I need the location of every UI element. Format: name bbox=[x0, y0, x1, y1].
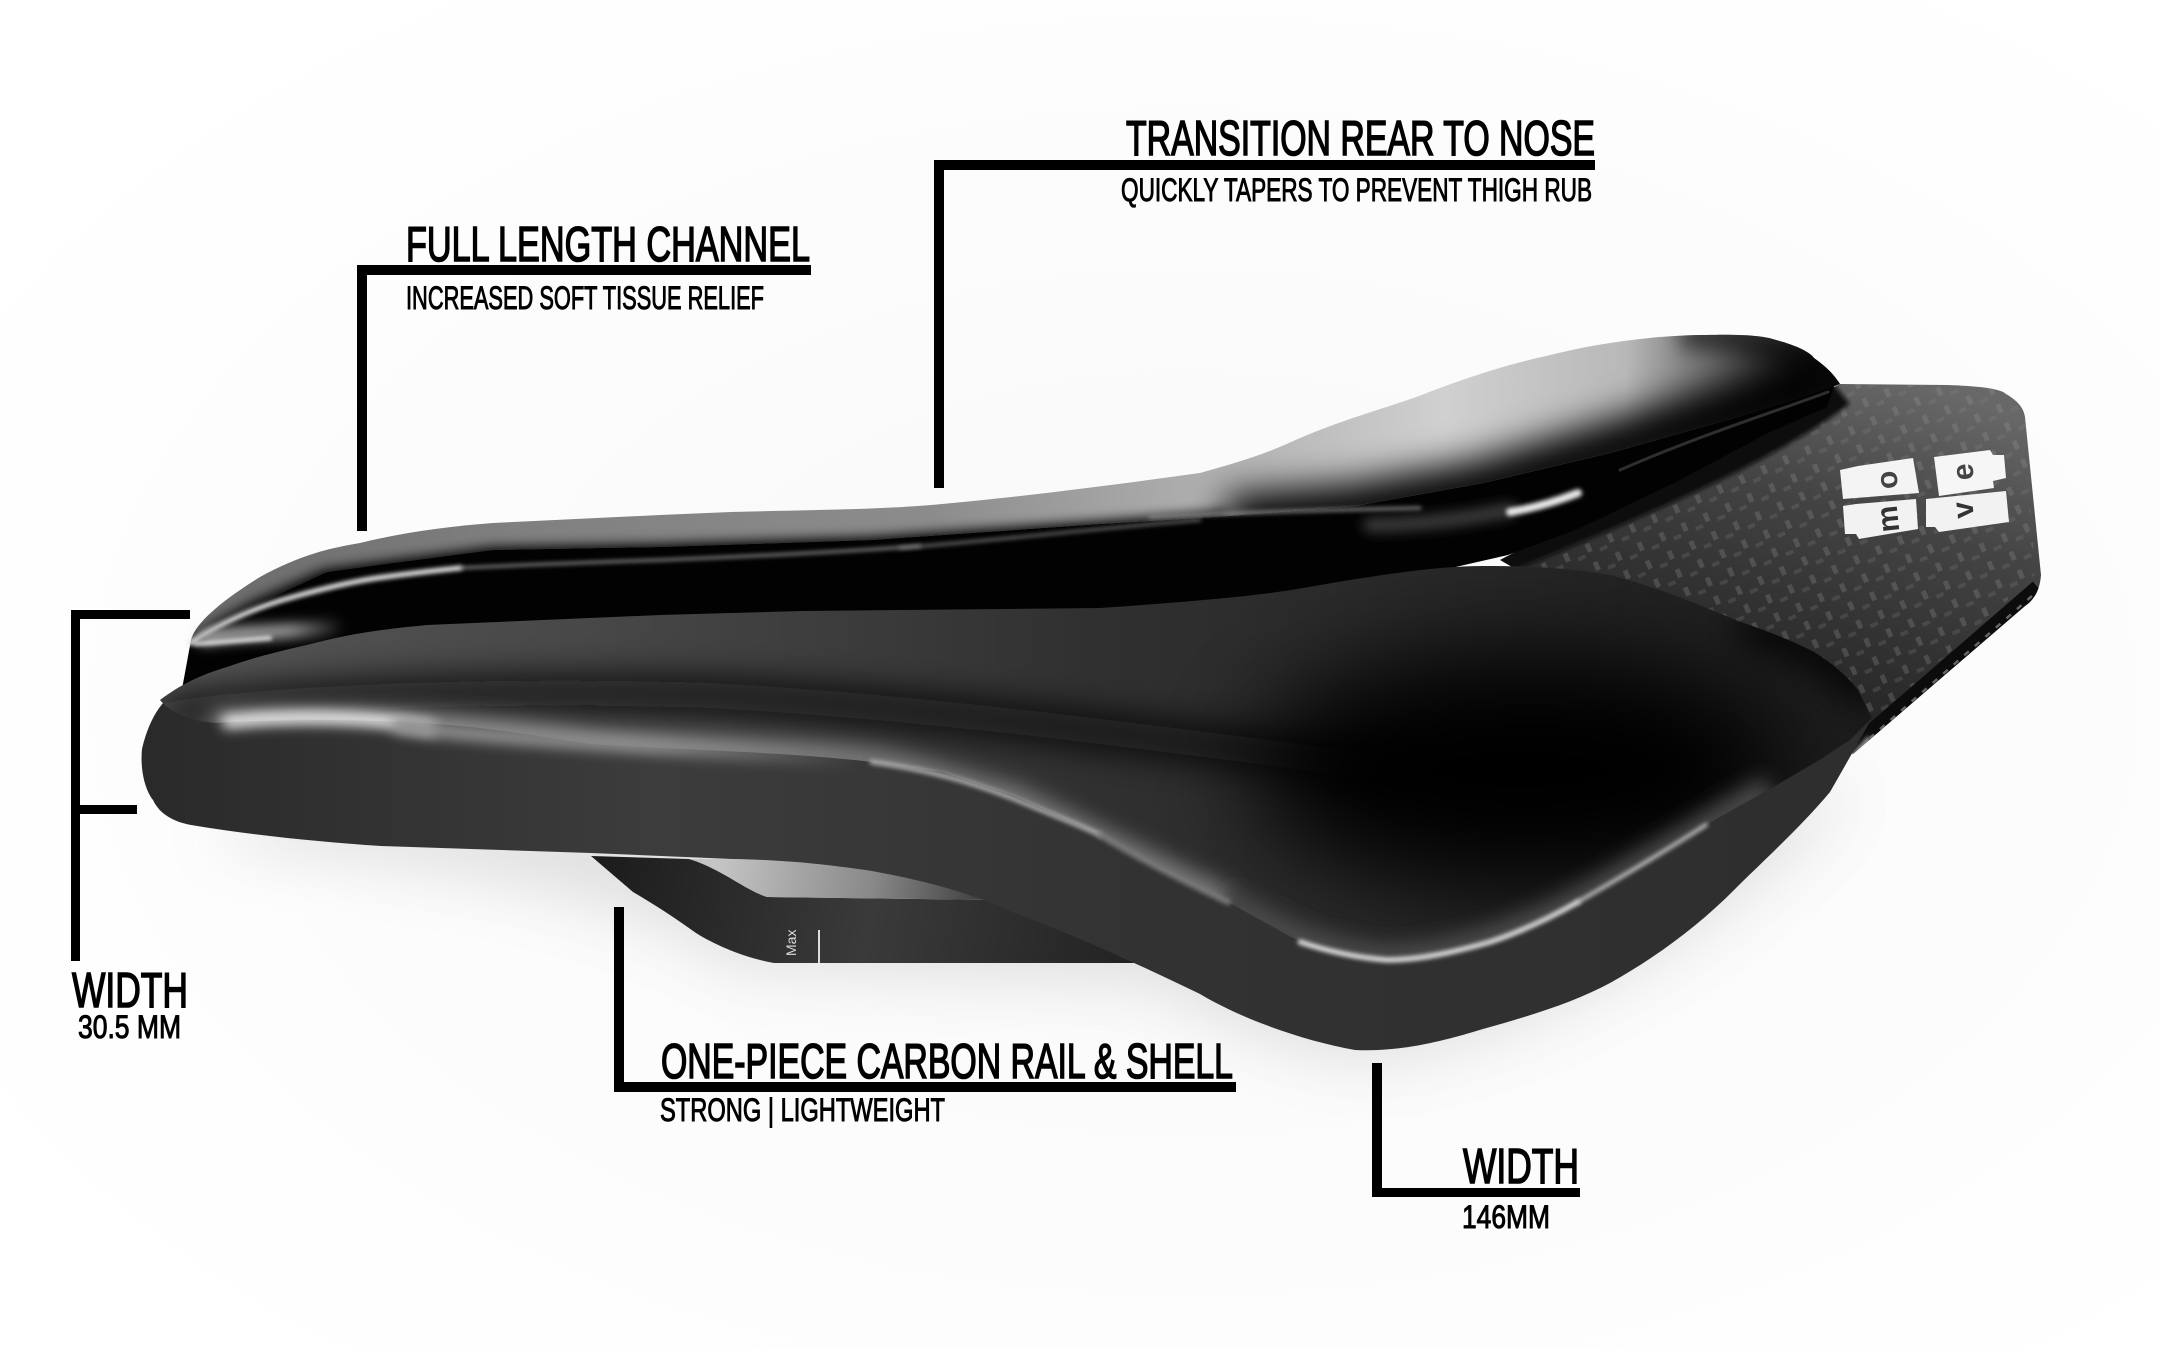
channel highlights bbox=[190, 392, 1828, 644]
front wing side band bbox=[142, 688, 1872, 1050]
carbon rail: Max bbox=[783, 930, 799, 956]
carbon nose bbox=[1500, 384, 2041, 760]
callout: one-piece carbon rail and shell: ONE-PIECE CARBON RAIL & SHELL bbox=[661, 1035, 1233, 1089]
ridge highlights bbox=[228, 718, 1706, 960]
callout: width 30.5 mm: 30.5 MM bbox=[78, 1009, 181, 1045]
callout: one-piece carbon rail and shell bbox=[614, 907, 1236, 1128]
callout: transition rear to nose: QUICKLY TAPERS TO PREVENT THIGH RUB bbox=[1121, 172, 1592, 208]
callout: transition rear to nose bbox=[934, 112, 1595, 488]
move sticker: v bbox=[1946, 500, 1981, 520]
move sticker: e bbox=[1946, 462, 1981, 482]
move sticker: m bbox=[1871, 504, 1906, 534]
move sticker bbox=[1840, 450, 2009, 539]
carbon rail bbox=[591, 856, 1139, 963]
callout: width 146mm: 146MM bbox=[1462, 1199, 1550, 1235]
callout: width 30.5 mm: WIDTH bbox=[72, 964, 188, 1018]
saddle shadow bbox=[200, 790, 1850, 1062]
far wing top surface bbox=[191, 334, 1840, 640]
callout: full length channel: FULL LENGTH CHANNEL bbox=[406, 218, 810, 272]
callout: width 146mm bbox=[1372, 1063, 1580, 1235]
callout: width 30.5 mm bbox=[71, 610, 190, 1045]
callout: full length channel: INCREASED SOFT TISSUE RELIEF bbox=[406, 280, 764, 316]
callout: width 146mm: WIDTH bbox=[1463, 1140, 1579, 1194]
move sticker: o bbox=[1870, 469, 1905, 491]
callout: transition rear to nose: TRANSITION REAR TO NOSE bbox=[1126, 112, 1595, 166]
far wing channel wall bbox=[180, 384, 1835, 700]
callout: one-piece carbon rail and shell: STRONG | LIGHTWEIGHT bbox=[660, 1092, 945, 1128]
front wing top surface bbox=[150, 560, 1880, 970]
callout: full length channel bbox=[357, 218, 811, 531]
saddle illustration bbox=[142, 320, 2041, 1050]
